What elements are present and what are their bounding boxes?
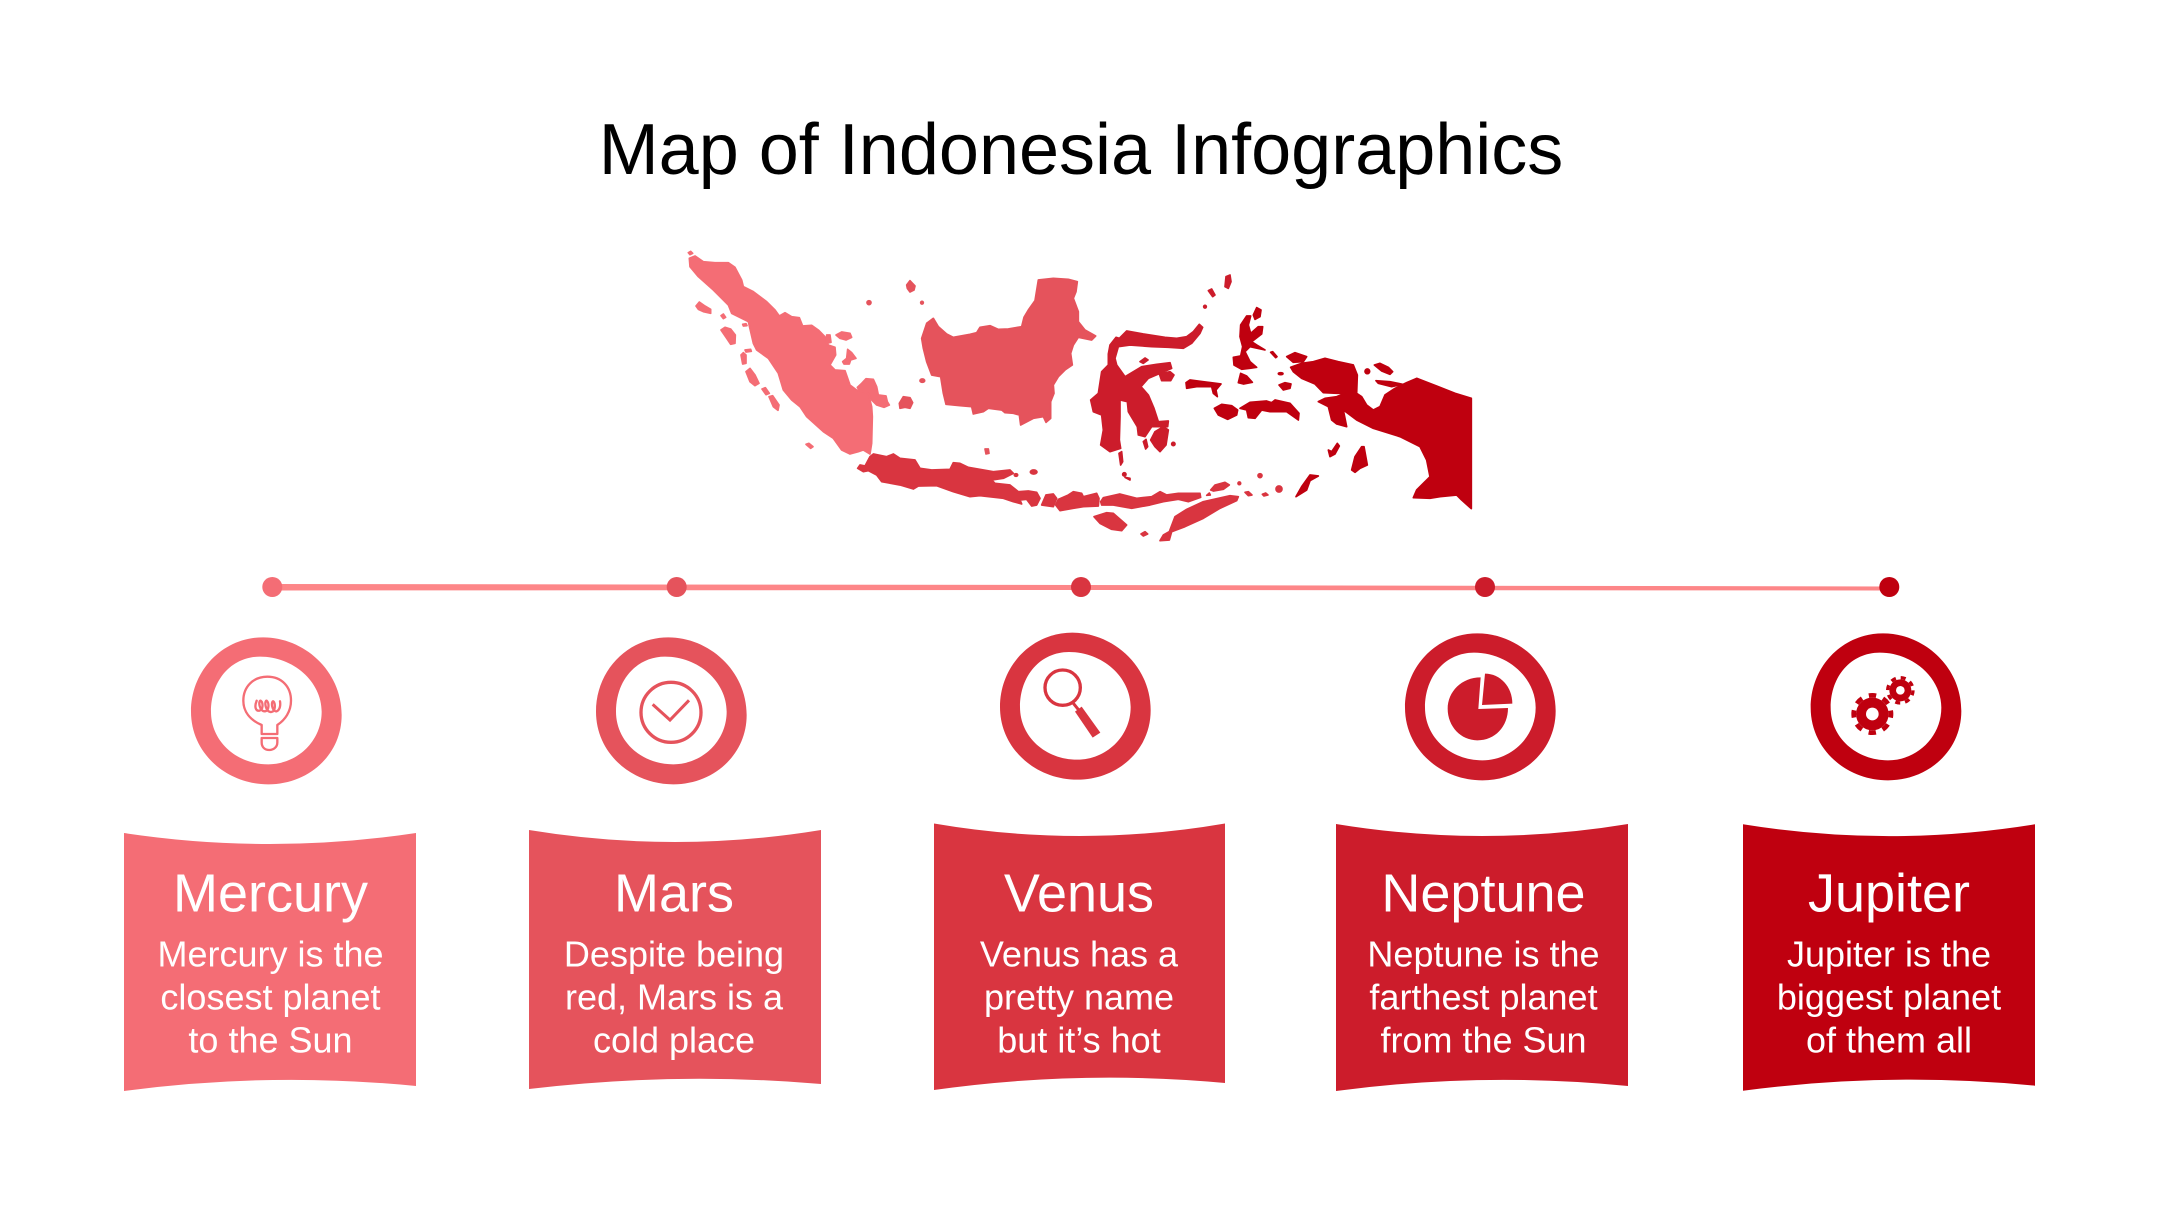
description: Jupiter is the	[1787, 934, 1991, 975]
heading: Mars	[614, 864, 734, 924]
panel: Venus	[934, 824, 1225, 1090]
icon badge: light bulb	[191, 637, 342, 784]
heading: Neptune	[1381, 864, 1586, 924]
icon badge: check mark	[596, 637, 747, 784]
description: to the Sun	[188, 1019, 353, 1060]
timeline	[262, 577, 1899, 597]
timeline dot: Venus	[1071, 577, 1091, 597]
map region: Java and Lesser Sunda	[858, 454, 1282, 541]
ring	[191, 637, 342, 784]
description: pretty name	[984, 976, 1174, 1018]
description: closest planet	[160, 976, 381, 1018]
ring	[1405, 633, 1556, 780]
icon: pie chart	[1448, 674, 1512, 740]
description: biggest planet	[1777, 976, 2001, 1018]
card background	[1743, 824, 2035, 1091]
ring	[596, 637, 747, 784]
card background	[1336, 824, 1628, 1091]
map region: Sumatra	[688, 251, 889, 454]
panel: Mercury	[124, 833, 416, 1091]
icon badge: magnifier	[1000, 633, 1151, 780]
description: red, Mars is a	[565, 976, 784, 1018]
icon: light bulb	[243, 677, 291, 750]
timeline dot: Jupiter	[1879, 577, 1899, 597]
icon: check mark in circle	[641, 682, 701, 742]
description: cold place	[593, 1019, 755, 1060]
heading: Venus	[1004, 864, 1154, 924]
icon badge: gears	[1811, 633, 1961, 780]
map region: Maluku and Papua	[1186, 308, 1471, 509]
icon: magnifier	[1045, 670, 1100, 738]
icon: gears	[1854, 678, 1913, 733]
timeline line	[272, 584, 1889, 590]
description: Neptune is the	[1367, 934, 1600, 975]
description: of them all	[1806, 1019, 1972, 1060]
title: Map of Indonesia Infographics	[599, 110, 1563, 190]
card background	[124, 833, 416, 1091]
panel: Mars	[529, 830, 821, 1089]
description: Mercury is the	[157, 934, 384, 975]
map region: Sulawesi	[1091, 275, 1231, 480]
description: Venus has a	[980, 934, 1179, 975]
map of Indonesia	[688, 251, 1471, 541]
map region: Kalimantan	[867, 278, 1096, 454]
timeline dot: Mercury	[262, 577, 282, 597]
panel: Jupiter	[1743, 824, 2035, 1091]
panel: Neptune	[1336, 824, 1628, 1091]
card background	[529, 830, 821, 1089]
description: from the Sun	[1380, 1019, 1587, 1060]
icon badge: pie chart	[1405, 633, 1556, 780]
ring	[1000, 633, 1151, 780]
heading: Mercury	[173, 864, 368, 924]
description: Despite being	[564, 934, 784, 975]
ring	[1811, 633, 1961, 780]
heading: Jupiter	[1808, 864, 1970, 924]
card background	[934, 824, 1225, 1090]
timeline dot: Mars	[667, 577, 687, 597]
timeline dot: Neptune	[1475, 577, 1495, 597]
description: but it’s hot	[997, 1019, 1161, 1060]
description: farthest planet	[1369, 976, 1598, 1018]
